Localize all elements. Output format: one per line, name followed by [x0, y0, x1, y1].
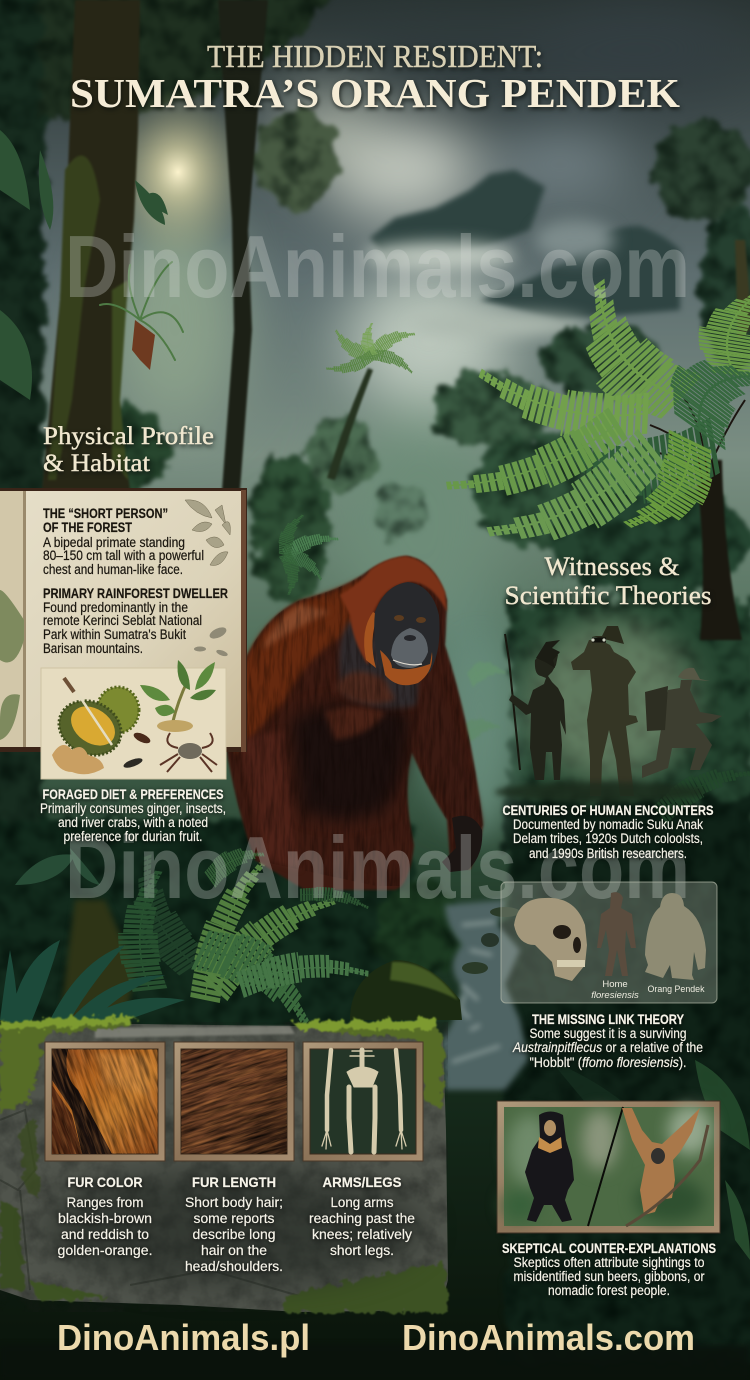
durian — [50, 678, 139, 765]
journal text — [43, 506, 228, 656]
crab — [160, 733, 217, 772]
panel labels — [591, 979, 705, 1001]
footer brand text: DinoAnimals.pl — [57, 1317, 310, 1358]
footer band — [0, 1345, 750, 1380]
tree trunks — [42, 0, 750, 640]
caption: fur length: describe long — [192, 1227, 276, 1242]
journal text: Barisan mountains. — [43, 641, 143, 656]
tribal figure — [509, 640, 566, 780]
officer — [571, 626, 638, 796]
jungle leaves — [0, 130, 168, 400]
caption: fur color: Ranges from — [66, 1195, 144, 1210]
journal text: PRIMARY RAINFOREST DWELLER — [43, 586, 228, 601]
title — [70, 38, 680, 116]
illustration: three witnesses — [495, 626, 722, 802]
text: missing link: THE MISSING LINK THEORY — [532, 1012, 684, 1027]
belly — [290, 703, 410, 820]
caption: arms and legs: Long arms — [330, 1195, 394, 1210]
text: human encounters — [502, 803, 714, 861]
skeleton bones — [322, 1050, 406, 1152]
binocular lenses — [591, 638, 606, 642]
caption: fur length: head/shoulders. — [185, 1259, 283, 1274]
text: human encounters: CENTURIES OF HUMAN ENCOUNTERS — [502, 803, 714, 818]
frame: fur color — [44, 1042, 166, 1162]
caption: fur length: Short body hair; — [185, 1195, 283, 1210]
spear — [505, 634, 520, 770]
fern over figure feet — [207, 845, 369, 908]
frame: fur length — [174, 1042, 294, 1162]
diet card — [41, 660, 226, 779]
mountains — [370, 170, 545, 262]
panel: open journal — [0, 488, 247, 779]
caption: fur length: some reports — [194, 1211, 275, 1226]
lower-right dark leaves — [550, 762, 750, 1260]
divider — [588, 1107, 623, 1226]
text: human encounters: Documented by nomadic Suku Anak — [513, 817, 703, 832]
misty foliage beside the figure — [460, 664, 505, 744]
eyes and mouth — [393, 615, 426, 665]
arm shading — [240, 730, 300, 870]
cheek hair — [364, 612, 378, 668]
sun glow — [103, 87, 253, 257]
kneeling researcher — [642, 668, 722, 778]
glow behind witnesses — [525, 620, 695, 780]
text: foraged diet: and river crabs, with a noted — [58, 815, 208, 830]
beard — [380, 650, 432, 685]
heading: physical profile: Physical Profile — [43, 423, 214, 450]
panel labels: Orang Pendek — [648, 984, 705, 995]
muzzle — [391, 628, 428, 668]
text: missing link: Some suggest it is a surviving — [530, 1026, 686, 1041]
text: missing link: "Hobblt" (ffomo floresiensis). — [530, 1055, 686, 1070]
caption: fur color: golden-orange. — [58, 1243, 152, 1258]
skull — [514, 898, 587, 981]
left page sketch — [0, 590, 24, 740]
journal text: chest and human-like face. — [43, 562, 183, 577]
journal text: 80–150 cm tall with a powerful — [43, 548, 204, 563]
footer brand text — [57, 1317, 695, 1358]
text: foraged diet: Primarily consumes ginger, insects, — [40, 801, 226, 816]
moss — [0, 1016, 448, 1312]
heading: witnesses: Witnesses & — [544, 552, 680, 581]
caption: arms and legs — [309, 1175, 415, 1258]
plant — [140, 660, 216, 732]
bugs — [122, 731, 152, 770]
journal text: OF THE FOREST — [43, 520, 133, 535]
panel: skull comparison — [501, 882, 717, 1003]
caption: arms and legs: ARMS/LEGS — [322, 1175, 402, 1190]
caption: fur color: blackish-brown — [58, 1211, 152, 1226]
text: foraged diet: FORAGED DIET & PREFERENCES — [42, 787, 224, 802]
journal text: Found predominantly in the — [43, 600, 188, 615]
title line two: SUMATRA’S ORANG PENDEK — [70, 70, 680, 116]
panel: stone tablet — [0, 983, 448, 1312]
heading: physical profile — [43, 423, 214, 477]
sun bear — [525, 1112, 574, 1222]
face — [374, 582, 440, 685]
text: missing link — [512, 1012, 703, 1070]
ginger — [52, 745, 104, 774]
text: skeptical explanations: nomadic forest people. — [548, 1283, 670, 1298]
heading: witnesses — [504, 552, 712, 610]
body — [226, 556, 483, 890]
sketch: leaves — [185, 500, 230, 565]
text: human encounters: Delam tribes, 1920s Dutch coloolsts, — [513, 831, 703, 846]
panel labels: floresiensis — [591, 990, 639, 1001]
homo floresiensis figure — [597, 892, 636, 976]
fur strands — [226, 556, 484, 886]
title line one: THE HIDDEN RESIDENT: — [207, 38, 543, 74]
text: skeptical explanations — [502, 1241, 716, 1298]
heading: physical profile: & Habitat — [43, 450, 150, 477]
mossy boulder — [350, 960, 462, 1020]
orangutan — [226, 556, 484, 890]
text: foraged diet: preference for durian fruit. — [64, 829, 202, 844]
sketch: insects — [194, 625, 228, 657]
footer brand text: DinoAnimals.com — [402, 1317, 695, 1358]
small tree-fern near book — [281, 513, 338, 595]
caption: arms and legs: short legs. — [330, 1243, 394, 1258]
journal text: remote Kerinci Seblat National — [43, 613, 202, 628]
frame: arms and legs — [303, 1042, 423, 1161]
chest gray patch — [339, 620, 420, 708]
big tree fern — [447, 282, 750, 556]
shoulder fur — [233, 578, 370, 755]
caption: fur length: FUR LENGTH — [192, 1175, 276, 1190]
undergrowth — [495, 782, 705, 802]
mossy stump — [60, 900, 135, 1020]
panel labels: Home — [602, 979, 628, 990]
right arm — [412, 660, 482, 830]
heading: witnesses: Scientific Theories — [504, 581, 712, 610]
head hair — [340, 556, 447, 665]
caption: arms and legs: reaching past the — [309, 1211, 415, 1226]
journal text: THE “SHORT PERSON” — [43, 506, 168, 521]
clouds and mist — [105, 5, 750, 810]
text: foraged diet — [40, 787, 226, 844]
journal text: Park within Sumatra's Bukit — [43, 627, 186, 642]
caption: fur color — [58, 1175, 152, 1258]
text: skeptical explanations: Skeptics often attribute sightings to — [514, 1255, 704, 1270]
caption: fur length — [185, 1175, 283, 1274]
bromeliad on trunk — [100, 262, 183, 360]
stream — [442, 900, 528, 1090]
gibbon — [622, 1108, 708, 1226]
broad leaves — [0, 940, 185, 1030]
dark text backing — [45, 1170, 425, 1286]
orang pendek silhouette — [645, 893, 706, 980]
caption: fur length: hair on the — [201, 1243, 267, 1258]
text: human encounters: and 1990s British researchers. — [529, 846, 687, 861]
cracks — [0, 1110, 330, 1305]
caption: fur color: and reddish to — [61, 1227, 149, 1242]
text: missing link: Austrainpitflecus or a relative of the — [512, 1040, 703, 1055]
foreground ferns — [128, 850, 368, 1024]
caption: fur color: FUR COLOR — [68, 1175, 143, 1190]
photo frame: sun bear and gibbon — [497, 1101, 720, 1233]
text: skeptical explanations: misidentified sun beers, gibbons, or — [514, 1269, 705, 1284]
caption: arms and legs: knees; relatively — [312, 1227, 412, 1242]
hand — [442, 816, 482, 872]
journal text: A bipedal primate standing — [43, 535, 185, 550]
palm near mist — [326, 323, 415, 375]
